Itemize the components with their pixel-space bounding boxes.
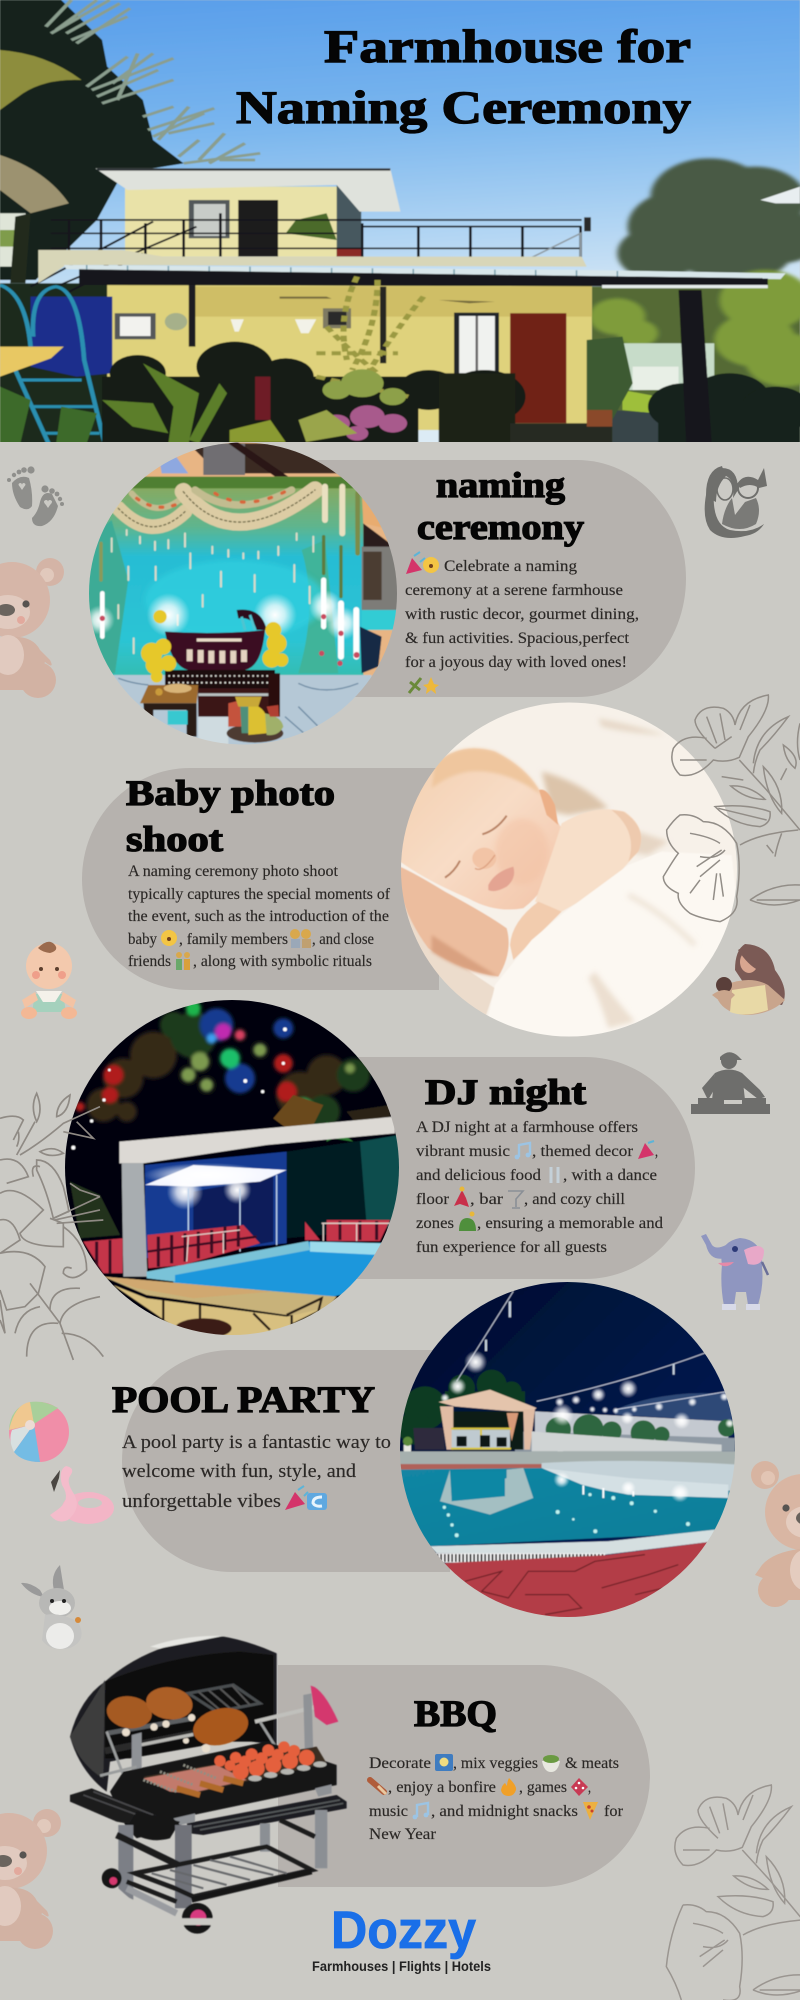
spit [105,1733,193,1751]
text: BBQ description: Decorate [369,1755,431,1772]
text: baby photo shoot description: , and close [312,931,374,948]
right wall [287,1135,398,1238]
text: baby photo shoot description: A naming ceremony photo shoot [128,863,339,880]
text: baby photo shoot description: , along with symbolic rituals [193,953,372,970]
firebox [110,1742,337,1838]
photo: naming ceremony cradle [85,440,405,750]
text: baby photo shoot description: typically captures the special moments of [128,886,391,903]
fence [532,1431,722,1451]
text: DJ night description: , themed decor [532,1143,634,1160]
wall [535,1411,728,1441]
text: BBQ description: , games [519,1779,567,1796]
text: BBQ description: New Year [369,1826,437,1843]
icon: teddy bear bottom left [0,1809,61,1949]
panel: pool party pill [122,1350,450,1572]
pavers [444,1542,707,1617]
pool edge [430,1530,715,1555]
icon: elephant [701,1234,768,1310]
text: BBQ description: , [588,1779,591,1796]
icon: baby footprints [7,466,64,526]
string lights [457,1291,728,1410]
text: DJ night description: , [655,1143,658,1160]
text: DJ night description: , and cozy chill [524,1191,626,1208]
heading: baby photo shoot [126,773,335,859]
floor band [38,250,587,283]
heading: BBQ: BBQ [414,1694,497,1735]
bench [103,1277,337,1318]
cradle [165,630,265,670]
pool [173,1242,385,1297]
foliage [75,1001,370,1128]
arm [535,809,641,912]
text: BBQ description: , mix veggies [453,1755,538,1772]
text: naming ceremony description: Celebrate a naming [444,558,577,575]
text: DJ night description: , ensuring a memorable and [477,1215,663,1232]
icon: teddy bear top left [0,558,64,698]
pouches [227,724,283,743]
rack [188,1685,260,1712]
icon: beach ball [9,1402,69,1462]
icon: baby illustration [21,942,77,1019]
icon: bunny [21,1565,82,1649]
left plant [70,1182,120,1238]
heading: DJ night: DJ night [425,1072,586,1112]
text: BBQ description [369,1754,624,1843]
photo: pool party at night [395,1278,740,1623]
text: naming ceremony description: ceremony at a serene farmhouse [405,582,623,599]
text: pool party description: unforgettable vibes [122,1492,281,1512]
lower rack [135,1847,312,1897]
text: baby photo shoot description: baby [128,931,157,948]
text: BBQ description: for [604,1803,624,1820]
photo: sleeping baby [401,702,737,1036]
lower wall [107,285,592,430]
panel: BBQ pill [278,1665,650,1887]
white canopy [119,1117,395,1163]
text: BBQ description: & meats [565,1755,619,1772]
railings [31,213,582,293]
text: baby photo shoot description [128,863,391,970]
decoration: lily line art left [0,1093,103,1360]
head [400,748,562,910]
text: DJ night description: , with a dance [563,1167,657,1184]
lid [70,1636,277,1792]
text: pool party description: welcome with fun, style, and [122,1462,357,1482]
upper house [125,187,342,257]
text: DJ night description: A DJ night at a farmhouse offers [416,1119,638,1136]
text: naming ceremony description [405,552,639,694]
heading: baby photo shoot: Baby photo [126,773,335,813]
hero title [236,21,692,134]
panel: DJ night pill [340,1057,695,1279]
text: DJ night description [416,1119,663,1256]
panel: baby photo shoot pill [82,768,439,990]
hero title: Naming Ceremony [236,82,692,134]
plants [102,342,526,443]
side trays [70,1788,157,1828]
blue interior [145,1152,287,1258]
blue wall and slide [31,297,112,377]
decoration: floral line art top right [663,695,800,922]
tent [438,1390,537,1413]
icon: DJ silhouette [691,1052,770,1114]
text: DJ night description: vibrant music [416,1143,510,1160]
panel: naming ceremony pill [300,460,686,697]
deck [400,1450,735,1470]
legs [118,1825,133,1902]
text: DJ night description: , bar [470,1191,504,1208]
hero title: Farmhouse for [324,21,691,73]
text: naming ceremony description: & fun activities. Spacious,perfect [405,630,630,647]
yellow flowers [141,610,288,683]
text: baby photo shoot description: friends [128,953,171,970]
text: naming ceremony description: for a joyous day with loved ones! [405,654,627,671]
icon: mother holding baby [712,944,785,1015]
logo: Dozzy [312,1901,491,1974]
logo: Dozzy: Farmhouses | Flights | Hotels [312,1959,491,1974]
text: DJ night description: and delicious food [416,1167,541,1184]
heading: baby photo shoot: shoot [126,819,223,859]
skewers [143,1765,247,1793]
hero photo: farmhouse [0,0,800,443]
icon: flamingo float [50,1466,114,1524]
icon: teddy bear right [751,1461,800,1607]
heading: pool party: POOL PARTY [112,1380,375,1421]
heading: naming ceremony: naming [436,465,565,505]
text: baby photo shoot description: , family members [179,931,288,948]
heading: naming ceremony [417,465,584,547]
trees [398,1370,522,1445]
right trees [617,158,800,283]
left palms [0,0,184,280]
face [482,816,507,834]
chickens [105,1693,154,1731]
text: BBQ description: music [369,1803,408,1820]
BBQ grill image [70,1636,347,1934]
logo: Dozzy: Dozzy [331,1901,476,1960]
heading: naming ceremony: ceremony [417,507,584,547]
floor [113,675,372,750]
chairs [83,1220,390,1273]
text: DJ night description: floor [416,1191,450,1208]
text: DJ night description: fun experience for all guests [416,1239,607,1256]
text: pool party description [122,1433,391,1512]
pool [395,1468,740,1546]
window + door [454,313,499,375]
icon: mother and child sketch [705,466,767,538]
stool [140,685,198,703]
text: pool party description: A pool party is a fantastic way to [122,1433,391,1453]
text: naming ceremony description: with rustic decor, gourmet dining, [405,606,639,623]
text: BBQ description: , enjoy a bonfire [388,1779,496,1796]
decoration: floral line art bottom right [666,1785,800,2000]
text: baby photo shoot description: the event, such as the introduction of the [128,908,389,925]
photo: DJ night poolside [60,995,405,1340]
text: BBQ description: , and midnight snacks [431,1803,578,1820]
blanket [485,852,738,1042]
text: DJ night description: zones [416,1215,454,1232]
